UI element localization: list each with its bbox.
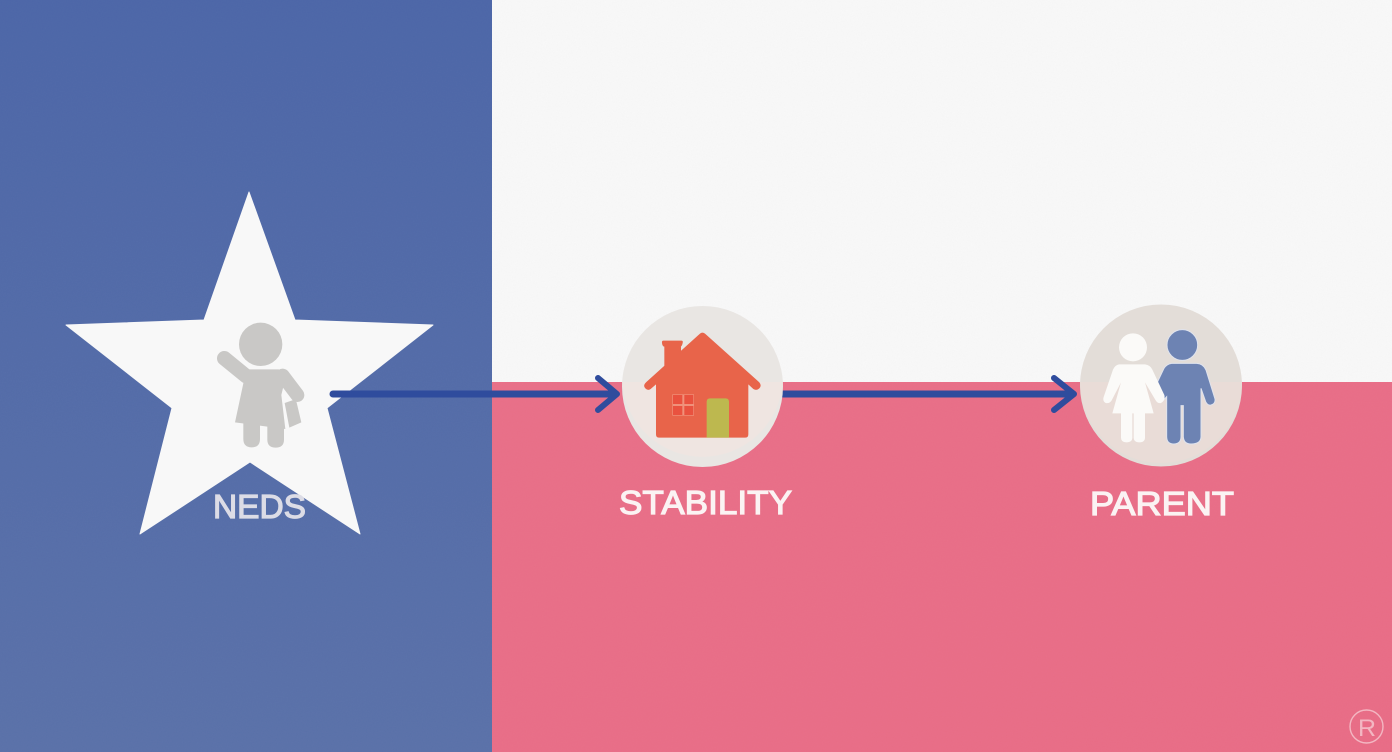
icon: girl with bag (224, 323, 301, 448)
house window (672, 394, 694, 416)
arrow: needs to stability (333, 378, 617, 410)
figure: white parent (1103, 333, 1165, 442)
logo mark (1350, 710, 1383, 743)
label: STABILITY: STABILITY (619, 484, 792, 521)
label: PARENT: PARENT (1090, 485, 1234, 522)
icon circle: parent (1080, 304, 1242, 466)
panel: white field (492, 0, 1392, 382)
panel: blue field (0, 0, 492, 752)
figure: blue parent (1157, 330, 1215, 444)
panel: red field (492, 382, 1392, 752)
icon: parent and child figures (1103, 330, 1215, 444)
logo mark: R (1358, 715, 1376, 742)
icon circle: stability (622, 306, 783, 467)
icon: house (644, 333, 761, 438)
handbag (285, 400, 301, 428)
star (66, 192, 433, 534)
label: NEDS: NEDS (213, 488, 306, 525)
arrow: stability to parent (783, 378, 1074, 410)
house door (707, 398, 729, 438)
